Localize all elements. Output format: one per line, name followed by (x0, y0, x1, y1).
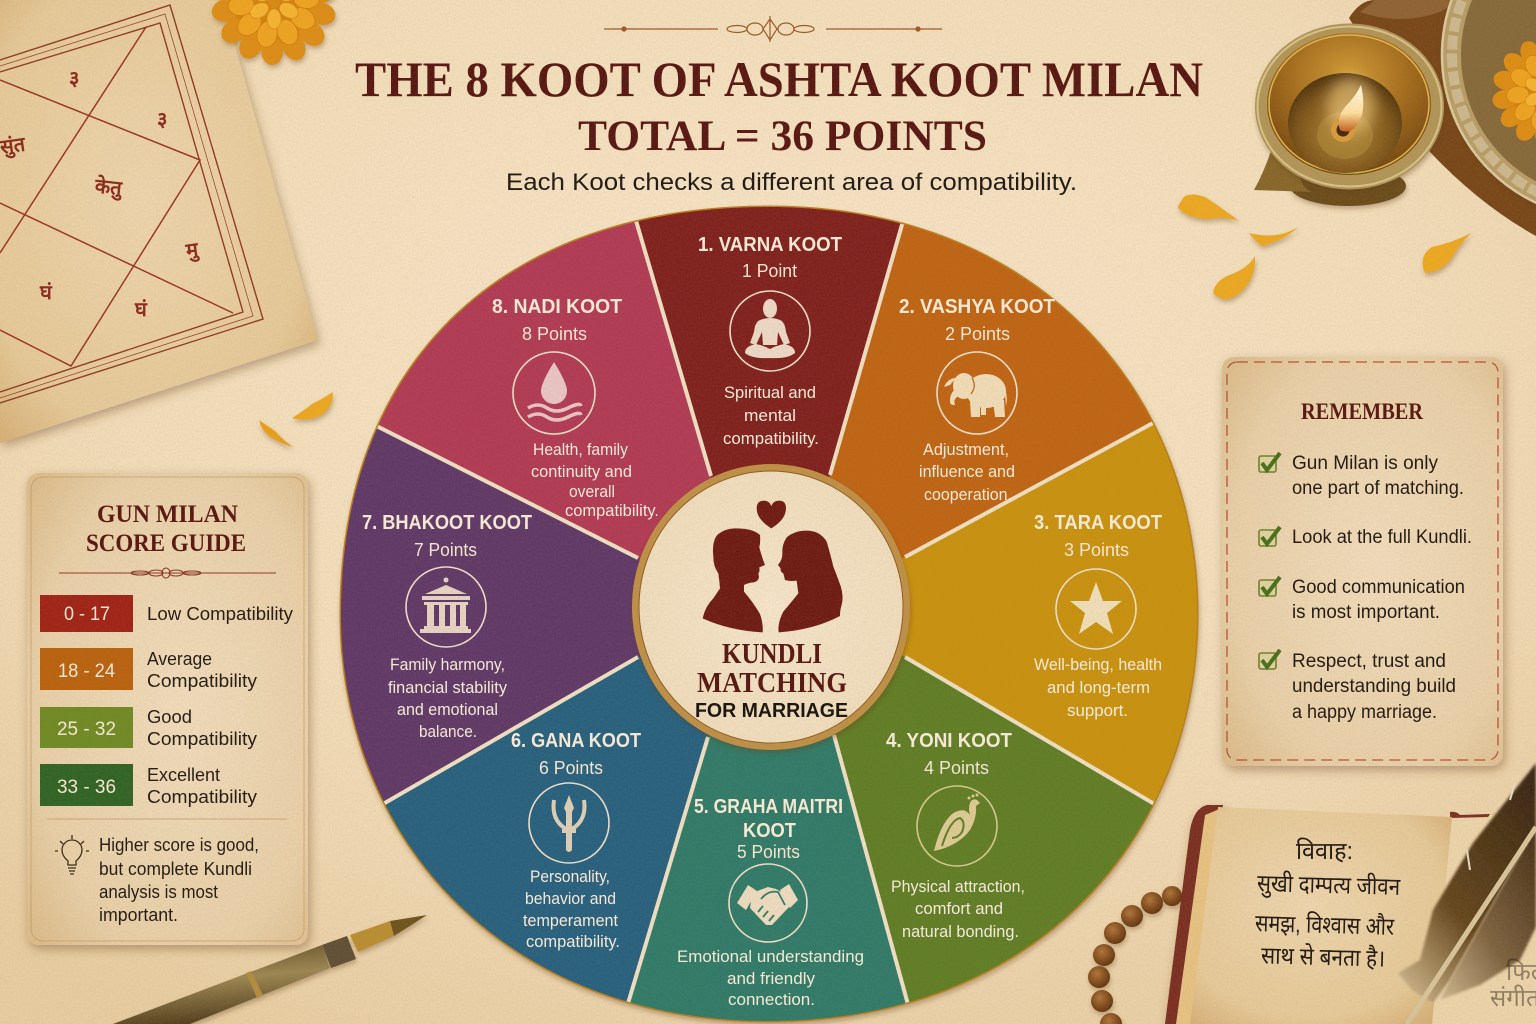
segment 2 vashya: Adjustment, (923, 441, 1009, 459)
remember list: Respect, trust and (1292, 651, 1446, 672)
segment 2 vashya: 2 Points (945, 324, 1010, 344)
yellow flower in plate (1492, 41, 1536, 141)
score row average: 18 - 24 (58, 661, 115, 682)
segment 4 yoni: natural bonding. (902, 923, 1019, 941)
flame (1327, 77, 1375, 142)
segment 5 graha maitri: and friendly (727, 970, 816, 988)
score row excellent: 33 - 36 (57, 777, 116, 798)
book text (1255, 837, 1401, 973)
score row good: Compatibility (147, 729, 257, 749)
segment 6 gana: 6 Points (539, 758, 603, 778)
segment 7 bhakoot: 7 Points (414, 540, 477, 560)
brass diya lamp (1254, 24, 1444, 206)
segment 1 varna: compatibility. (723, 430, 819, 448)
remember list (1292, 453, 1472, 723)
remember list: Look at the full Kundli. (1292, 527, 1472, 548)
score row low (40, 595, 293, 632)
segment 6 gana (511, 730, 641, 951)
icon: meditating figure (745, 299, 795, 358)
center hub: KUNDLI (722, 639, 822, 670)
center hub: FOR MARRIAGE (695, 700, 848, 722)
panel: gun milan score guide: GUN MILAN (97, 501, 238, 528)
segment 1 varna (698, 234, 842, 448)
title: THE 8 KOOT OF ASHTA KOOT MILAN (355, 51, 1203, 107)
book text: समझ, विश्वास और (1255, 909, 1395, 941)
kundli chart labels: ३ (69, 68, 79, 90)
book text: सुखी दाम्पत्य जीवन (1257, 869, 1401, 902)
koot wheel (320, 190, 1210, 1024)
segment 7 bhakoot: balance. (419, 723, 477, 741)
prayer beads (1088, 886, 1182, 1024)
remember list: a happy marriage. (1292, 702, 1437, 723)
score note: important. (99, 905, 178, 925)
icon: peacock (934, 794, 980, 851)
segment 8 nadi: 8 Points (522, 324, 587, 344)
segment 3 tara (1034, 512, 1162, 720)
score row excellent: Compatibility (147, 787, 257, 807)
segment 7 bhakoot (362, 512, 532, 741)
icon: light bulb (55, 835, 89, 874)
remember list: one part of matching. (1292, 478, 1464, 499)
segment 6 gana: 6. GANA KOOT (511, 730, 641, 752)
icon: trident (554, 795, 584, 852)
segment 3 tara: and long-term (1047, 679, 1150, 697)
segment 6 gana: behavior and (525, 890, 616, 908)
icon: couple silhouette and heart (703, 501, 843, 632)
segment 5 graha maitri: 5. GRAHA MAITRI (694, 796, 843, 818)
segment 8 nadi (492, 296, 659, 520)
icon: star (1070, 582, 1122, 634)
subtitle total points: TOTAL = 36 POINTS (578, 113, 987, 160)
segment 8 nadi: overall (569, 483, 615, 501)
score row excellent (40, 764, 257, 807)
segment 1 varna: 1 Point (742, 261, 797, 281)
icon: temple (420, 578, 471, 633)
icon: handshake (737, 884, 798, 925)
segment 4 yoni (886, 730, 1025, 941)
book text: विवाह: (1296, 837, 1353, 865)
tagline: Each Koot checks a different area of compatibility. (506, 169, 1077, 196)
faded right page text (1490, 958, 1536, 1012)
segment 8 nadi: Health, family (533, 441, 629, 459)
score row average (40, 648, 257, 691)
segment 1 varna: 1. VARNA KOOT (698, 234, 842, 256)
score row excellent: Excellent (147, 765, 220, 785)
segment 2 vashya (899, 296, 1055, 504)
segment 3 tara: support. (1067, 702, 1128, 720)
segment 8 nadi: compatibility. (565, 502, 659, 520)
segment 8 nadi: 8. NADI KOOT (492, 296, 622, 318)
segment 3 tara: 3. TARA KOOT (1034, 512, 1162, 534)
segment 8 nadi: continuity and (531, 463, 632, 481)
score row average: Average (147, 649, 212, 669)
score note: but complete Kundli (99, 859, 252, 879)
segment 6 gana: compatibility. (526, 933, 620, 951)
score row low: Low Compatibility (147, 604, 293, 624)
segment 6 gana: temperament (523, 912, 618, 930)
score row good (40, 707, 257, 749)
feather quill (1398, 763, 1536, 1024)
segment 4 yoni: 4. YONI KOOT (886, 730, 1012, 752)
icon: elephant (944, 373, 1007, 417)
segment 2 vashya: 2. VASHYA KOOT (899, 296, 1055, 318)
segment 7 bhakoot: 7. BHAKOOT KOOT (362, 512, 532, 534)
segment 1 varna: mental (744, 407, 796, 425)
panel: remember: REMEMBER (1301, 399, 1423, 424)
segment 3 tara: Well-being, health (1034, 656, 1162, 674)
remember list: Good communication (1292, 577, 1465, 598)
score note: Higher score is good, (99, 835, 259, 855)
center hub (632, 464, 910, 750)
kundli chart labels: घं (134, 299, 148, 321)
center hub: MATCHING (697, 668, 847, 699)
segment 2 vashya: influence and (919, 463, 1015, 481)
segment 5 graha maitri (677, 796, 864, 1009)
kundli chart labels: ३ (157, 109, 167, 131)
kundli chart labels: केतु (93, 173, 125, 201)
segment 5 graha maitri: KOOT (743, 820, 796, 842)
segment 5 graha maitri: connection. (728, 991, 815, 1009)
icon: water drop (528, 362, 581, 420)
segment 1 varna: Spiritual and (724, 384, 816, 402)
segment 6 gana: Personality, (530, 868, 610, 886)
ornament above title (604, 16, 942, 42)
kundli chart paper (0, 0, 318, 443)
brown cloth and brass plate (1349, 0, 1536, 236)
remember list: Gun Milan is only (1292, 453, 1438, 474)
segment 7 bhakoot: financial stability (388, 679, 508, 697)
score row good: Good (147, 707, 192, 727)
fallen petals left (259, 392, 333, 447)
segment 2 vashya: cooperation. (924, 486, 1012, 504)
panel: gun milan score guide (27, 473, 308, 945)
panel: gun milan score guide: SCORE GUIDE (86, 530, 246, 557)
score row low: 0 - 17 (64, 604, 110, 625)
book text: साथ से बनता है। (1261, 941, 1385, 973)
panel: remember (1222, 357, 1503, 766)
segment 3 tara: 3 Points (1064, 540, 1129, 560)
segment 4 yoni: Physical attraction, (891, 878, 1025, 896)
remember list: is most important. (1292, 602, 1440, 623)
marigold flower (210, 0, 338, 65)
kundli chart labels: घं (39, 282, 53, 304)
remember list: understanding build (1292, 676, 1456, 697)
segment 7 bhakoot: and emotional (397, 701, 498, 719)
open book (1165, 805, 1536, 1024)
kundli chart labels: मु (184, 239, 201, 264)
segment 4 yoni: 4 Points (924, 758, 989, 778)
segment 5 graha maitri: 5 Points (737, 842, 800, 862)
score row good: 25 - 32 (57, 719, 116, 740)
pen (113, 915, 427, 1024)
score note: analysis is most (99, 882, 218, 902)
score note (99, 835, 259, 925)
segment 5 graha maitri: Emotional understanding (677, 948, 864, 966)
score row average: Compatibility (147, 671, 257, 691)
kundli chart labels (0, 68, 201, 321)
segment 7 bhakoot: Family harmony, (390, 656, 505, 674)
segment 4 yoni: comfort and (915, 900, 1003, 918)
fallen petals right (1178, 194, 1471, 299)
icon: checkmarks (1259, 453, 1280, 669)
